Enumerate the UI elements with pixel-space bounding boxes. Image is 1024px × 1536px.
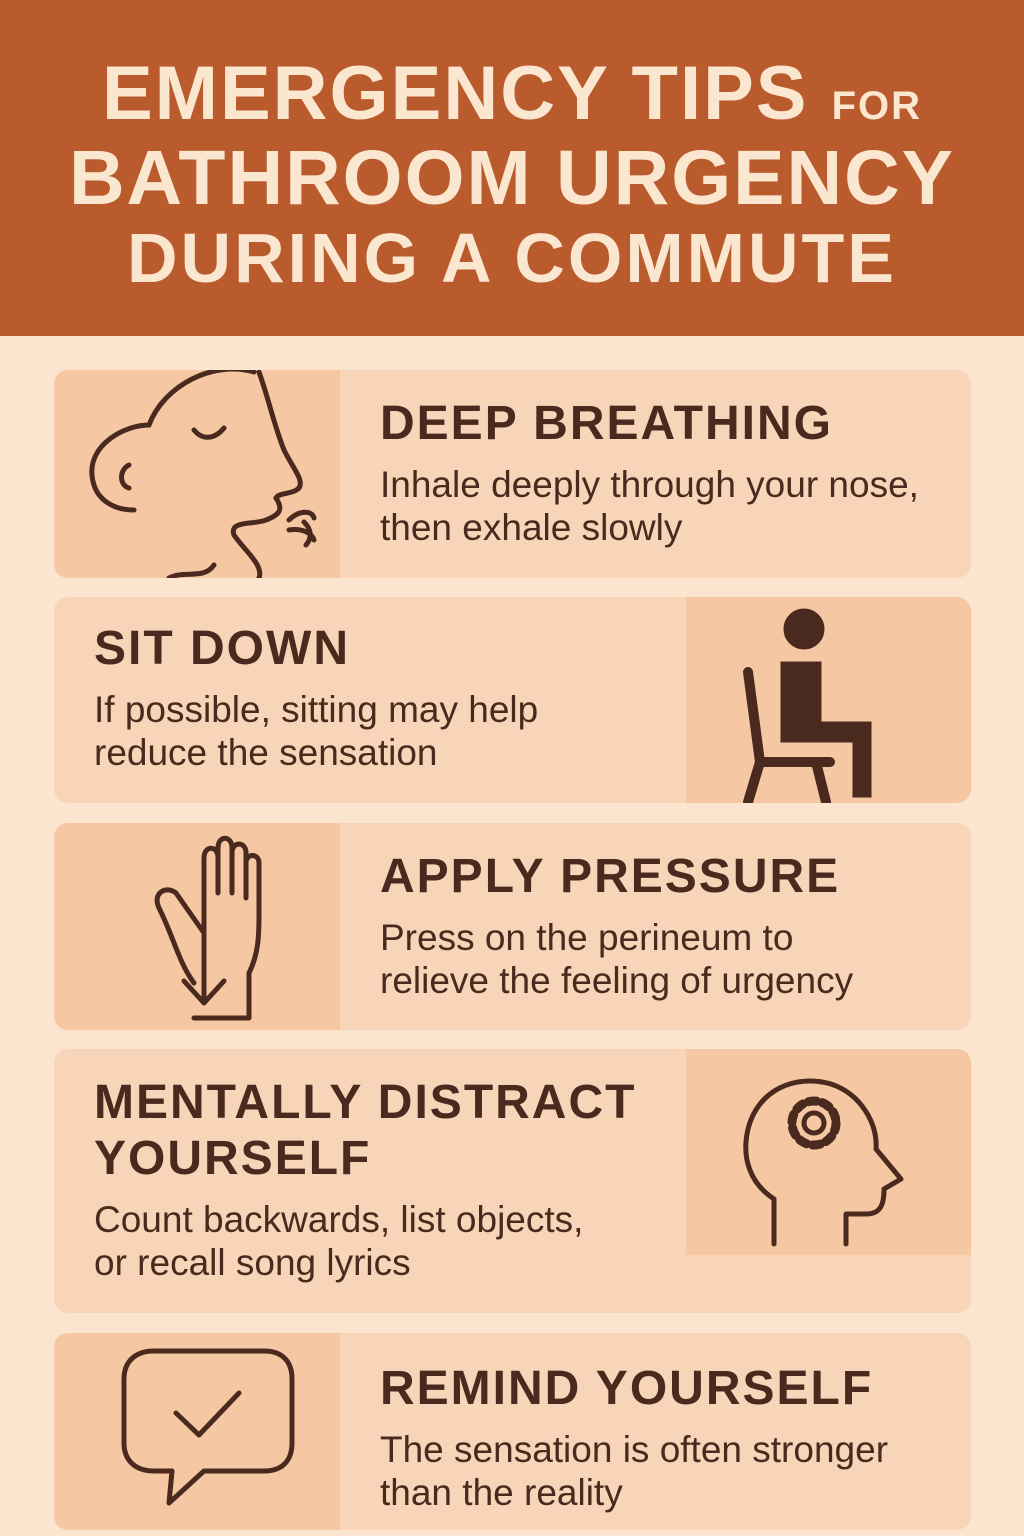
icon: speech bubble check — [54, 1333, 340, 1530]
heading: REMIND YOURSELF — [380, 1362, 873, 1415]
heading: SIT DOWN — [94, 622, 350, 675]
description: or recall song lyrics — [94, 1242, 411, 1283]
title line 1: EMERGENCY TIPS FOR — [102, 51, 922, 136]
panel: apply pressure — [54, 823, 971, 1030]
icon: breathing face — [54, 370, 340, 578]
description — [380, 917, 853, 1001]
heading: MENTALLY DISTRACT — [94, 1076, 636, 1129]
description: reduce the sensation — [94, 732, 438, 773]
header — [0, 0, 1024, 336]
description: If possible, sitting may help — [94, 689, 538, 730]
description — [380, 1429, 888, 1513]
description: Press on the perineum to — [380, 917, 793, 958]
icon: head with gear — [686, 1049, 972, 1255]
panel: sit down — [54, 597, 971, 803]
description: than the reality — [380, 1472, 623, 1513]
panel: mentally distract — [54, 1049, 971, 1313]
icon: hand with arrow — [54, 823, 340, 1030]
title line 2: BATHROOM URGENCY — [69, 135, 955, 221]
description — [94, 689, 538, 773]
heading: APPLY PRESSURE — [380, 850, 840, 903]
title line 3: DURING A COMMUTE — [127, 219, 897, 297]
description: Inhale deeply through your nose, — [380, 464, 919, 505]
description: then exhale slowly — [380, 507, 682, 548]
description: Count backwards, list objects, — [94, 1199, 583, 1240]
description — [94, 1199, 583, 1283]
panel: remind yourself — [54, 1333, 971, 1530]
heading — [94, 1076, 636, 1185]
heading: DEEP BREATHING — [380, 397, 833, 450]
description: relieve the feeling of urgency — [380, 960, 853, 1001]
description — [380, 464, 919, 548]
heading: YOURSELF — [94, 1132, 371, 1185]
description: The sensation is often stronger — [380, 1429, 888, 1470]
icon: seated person — [686, 597, 972, 803]
panel: deep breathing — [54, 370, 971, 578]
